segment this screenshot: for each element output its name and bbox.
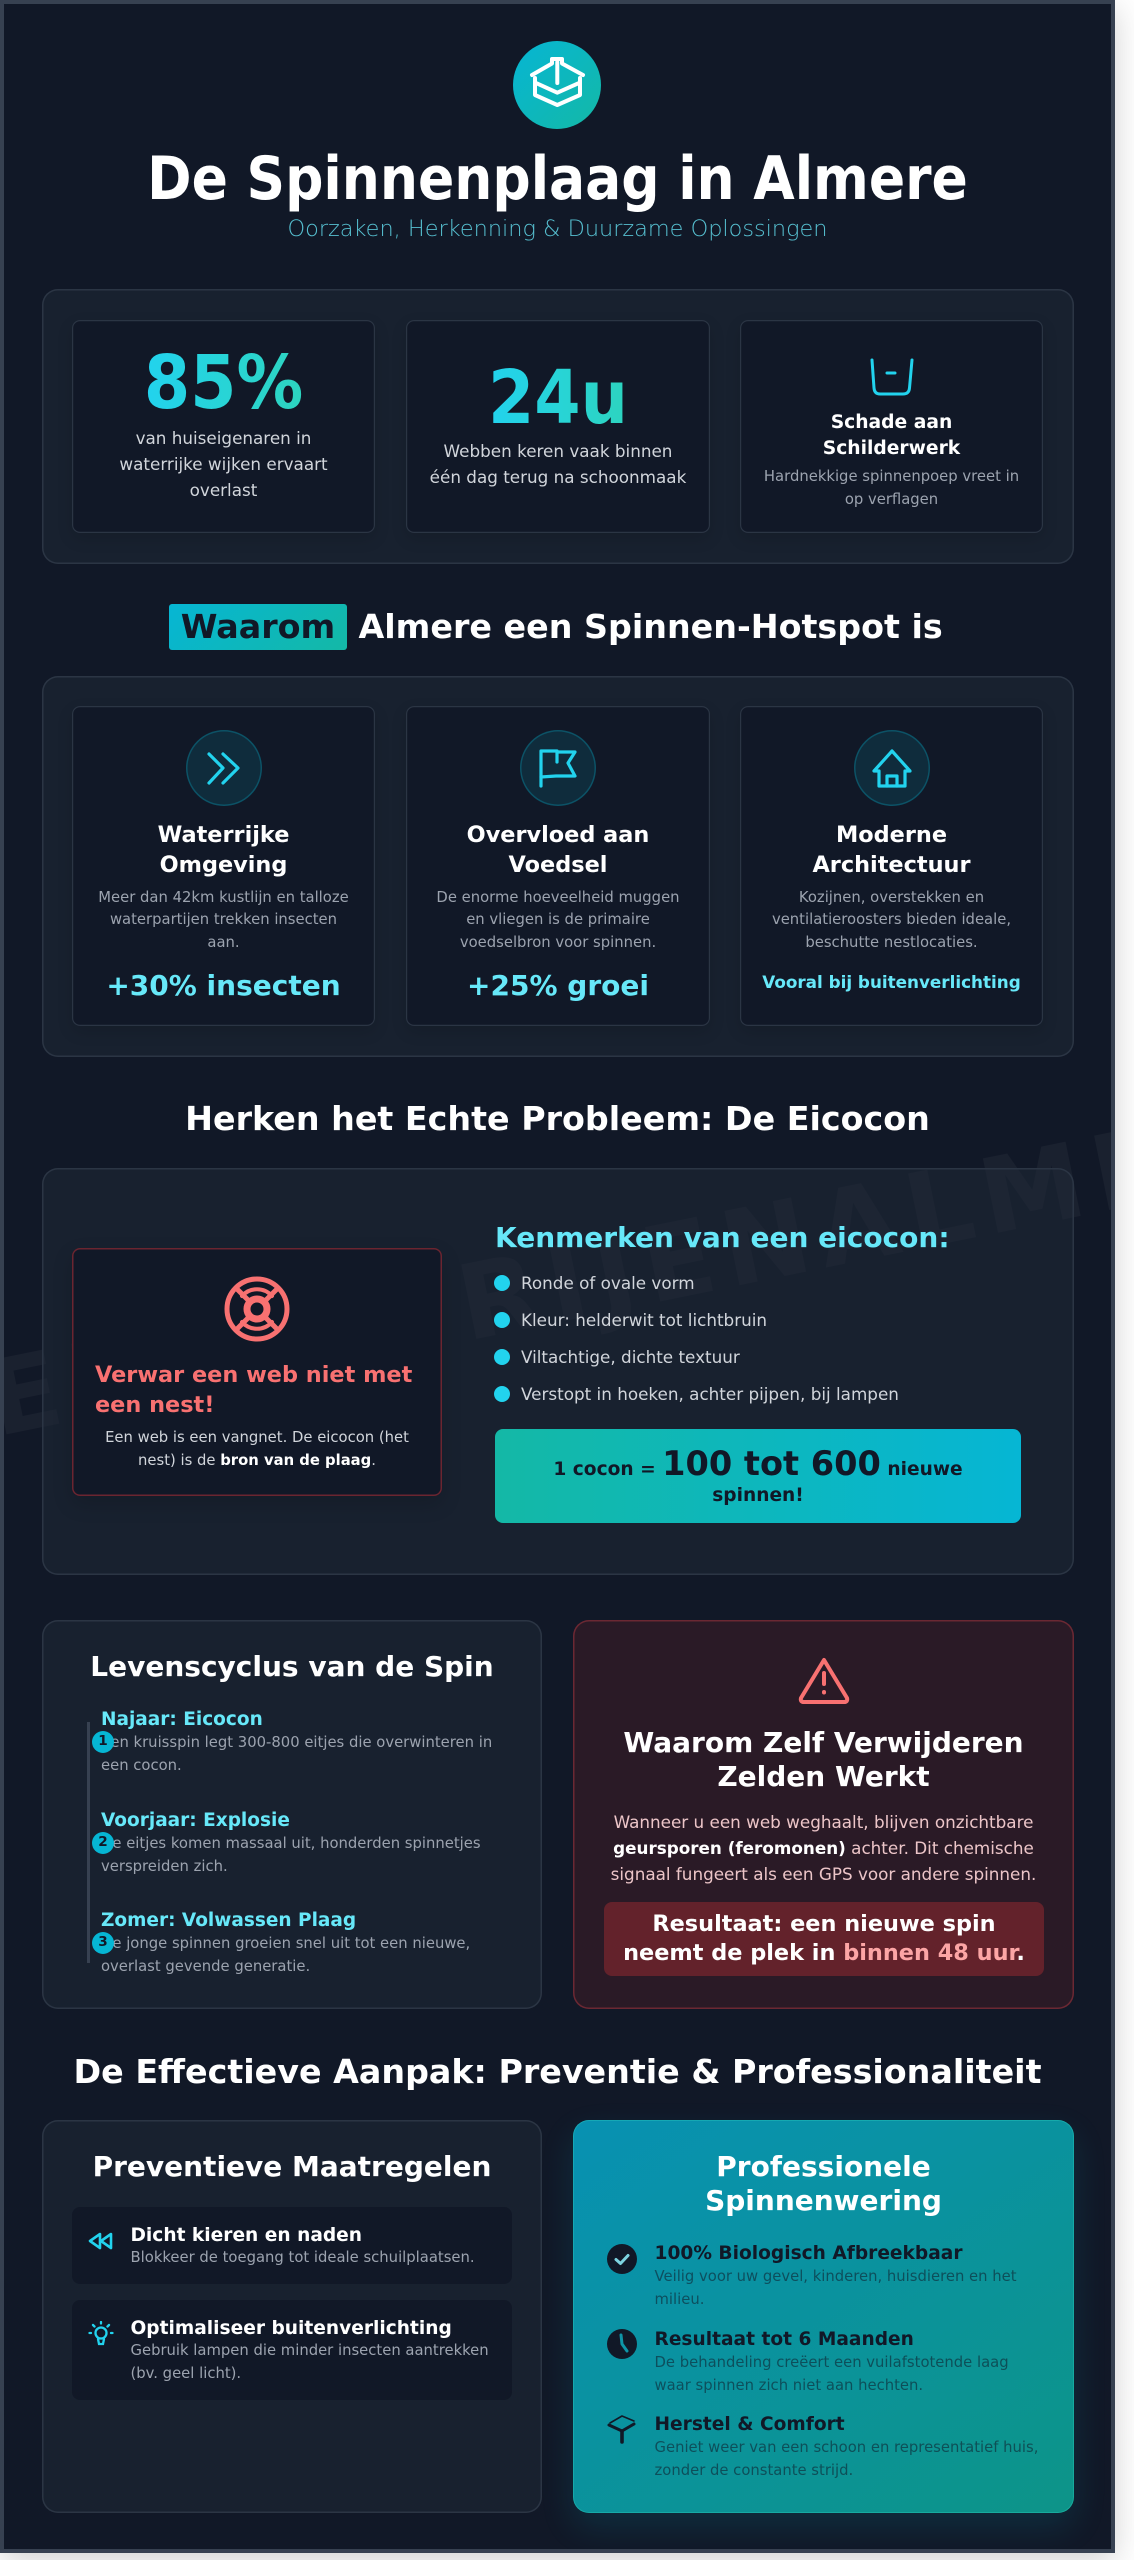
benefit: resultaat — [607, 2329, 1009, 2394]
callout: 100 tot 600: 1 cocon = 100 tot 600 nieuwe — [553, 1444, 963, 1483]
stat description: waterrijke wijken ervaart — [119, 454, 328, 474]
body text: signaal fungeert als een GPS voor andere spinnen. — [611, 1864, 1036, 1884]
card description: beschutte nestlocaties. — [805, 934, 978, 951]
body text — [611, 1812, 1036, 1884]
timeline step 3: overlast gevende generatie. — [101, 1958, 310, 1974]
card title: Waterrijke — [158, 822, 289, 848]
panel title — [623, 1726, 1024, 1793]
stat description: van huiseigenaren in — [136, 428, 311, 448]
icon: tool — [608, 2415, 636, 2444]
card stat: +30% insecten — [106, 969, 341, 1002]
features heading: Kenmerken van een eicocon: — [495, 1221, 950, 1254]
list item: Ronde of ovale vorm — [521, 1273, 695, 1293]
benefit: resultaat: waar spinnen zich niet aan hechten. — [654, 2376, 923, 2394]
heading: eicocon: Herken het Echte Probleem: De Eicocon — [185, 1099, 930, 1138]
step number — [92, 1731, 114, 1753]
benefit: resultaat: Resultaat tot 6 Maanden — [654, 2329, 914, 2350]
timeline step 2: Voorjaar: Explosie — [101, 1810, 290, 1831]
benefit: herstel — [608, 2414, 1038, 2478]
measure: verlichting — [72, 2300, 512, 2400]
card description: Kozijnen, overstekken en — [799, 889, 984, 906]
heading: aanpak: De Effectieve Aanpak: Preventie & Professionaliteit — [74, 2052, 1042, 2091]
step number: 1 — [98, 1733, 108, 1749]
panel title: Professionele — [716, 2150, 931, 2183]
measure: kieren: Dicht kieren en naden — [130, 2225, 362, 2246]
card description — [98, 889, 349, 951]
benefit: resultaat: De behandeling creëert een vuilafstotende laag — [654, 2354, 1009, 2371]
icon: house — [854, 730, 930, 806]
benefit: herstel: Herstel & Comfort — [654, 2414, 845, 2435]
timeline step 2: verspreiden zich. — [101, 1858, 228, 1874]
card description: aan. — [207, 934, 240, 951]
panel title: Zelden Werkt — [717, 1760, 930, 1793]
stat number: 24u — [488, 355, 628, 441]
benefit: herstel: zonder de constante strijd. — [654, 2462, 853, 2478]
card description — [436, 889, 680, 951]
panel title: Preventieve Maatregelen — [93, 2150, 491, 2183]
card description: op verflagen — [845, 490, 938, 508]
timeline step 2 — [92, 1810, 481, 1874]
timeline step 2: De eitjes komen massaal uit, honderden spinnetjes — [101, 1835, 481, 1852]
card title — [467, 822, 649, 878]
measure: verlichting: (bv. geel licht). — [130, 2364, 241, 2382]
timeline step 3: Zomer: Volwassen Plaag — [101, 1910, 356, 1931]
stat description: Webben keren vaak binnen — [444, 441, 672, 461]
benefit: herstel: Geniet weer van een schoon en representatief huis, — [654, 2439, 1038, 2456]
icon: lifebuoy — [224, 1276, 290, 1342]
callout: 100 tot 600: spinnen! — [712, 1485, 804, 1506]
card: overvloed aan voedsel — [406, 706, 710, 1026]
card description: Meer dan 42km kustlijn en talloze — [98, 889, 349, 906]
highlighted word: Waarom — [181, 607, 335, 646]
card description: De enorme hoeveelheid muggen — [436, 889, 680, 906]
step number — [92, 1832, 114, 1854]
warning text: Een web is een vangnet. De eicocon (het — [105, 1429, 409, 1446]
card description: ventilatieroosters bieden ideale, — [772, 911, 1011, 928]
icon: light bulb — [88, 2321, 114, 2346]
body text: geursporen (feromonen) achter. Dit chemische — [613, 1838, 1034, 1858]
feature list — [494, 1273, 899, 1404]
result box — [604, 1902, 1044, 1976]
card description: Hardnekkige spinnenpoep vreet in — [764, 468, 1019, 485]
stat card: 85% — [72, 320, 375, 533]
icon: rewind — [88, 2232, 112, 2250]
warning title: Verwar een web niet met — [95, 1362, 412, 1388]
stat number: 85% — [144, 340, 303, 426]
stat description — [430, 441, 686, 487]
result box: Resultaat: een nieuwe spin — [652, 1911, 996, 1937]
timeline step 1: een cocon. — [101, 1756, 182, 1774]
card title — [812, 822, 971, 878]
timeline step 3 — [92, 1910, 470, 1974]
card title — [823, 412, 960, 459]
panel title: Levenscyclus van de Spin — [90, 1650, 494, 1683]
body text: Wanneer u een web weghaalt, blijven onzichtbare — [614, 1812, 1033, 1832]
icon: warning triangle — [798, 1658, 850, 1704]
card: waterrijke omgeving — [72, 706, 375, 1026]
card description: voedselbron voor spinnen. — [460, 934, 656, 951]
card description: en vliegen is de primaire — [466, 911, 650, 928]
stat description: één dag terug na schoonmaak — [430, 467, 686, 487]
card title: Omgeving — [160, 852, 287, 878]
warning card — [72, 1248, 442, 1496]
card title: Moderne — [836, 822, 947, 848]
heading text: Almere een Spinnen-Hotspot is — [358, 607, 943, 646]
icon: flag — [520, 730, 596, 806]
benefit: biologisch — [607, 2243, 1017, 2308]
warning text — [105, 1429, 409, 1469]
step number: 2 — [98, 1834, 108, 1850]
warning title: een nest! — [95, 1392, 214, 1418]
step number — [92, 1932, 114, 1954]
result box: neemt de plek in binnen 48 uur. — [623, 1940, 1025, 1966]
icon: double chevron — [186, 730, 262, 806]
list item: Kleur: helderwit tot lichtbruin — [521, 1310, 767, 1330]
icon: cup — [870, 358, 914, 396]
icon: clock — [607, 2329, 637, 2359]
panel: reasons — [42, 676, 1074, 1057]
callout: 100 tot 600 — [495, 1429, 1021, 1523]
panel title: Waarom Zelf Verwijderen — [623, 1726, 1024, 1759]
warning text: nest) is de bron van de plaag. — [138, 1452, 376, 1469]
timeline line — [87, 1722, 90, 1963]
measure: kieren: Blokkeer de toegang tot ideale schuilplaatsen. — [130, 2249, 475, 2266]
card title — [158, 822, 289, 878]
panel title — [705, 2150, 942, 2217]
step number: 3 — [98, 1934, 108, 1950]
measure: verlichting: Optimaliseer buitenverlichting — [130, 2318, 452, 2339]
card stat: +25% groei — [467, 969, 649, 1002]
card: moderne architectuur — [740, 706, 1043, 1026]
card description — [764, 468, 1019, 508]
icon: check — [607, 2244, 637, 2274]
warning title — [95, 1362, 412, 1418]
timeline step 1: Najaar: Eicocon — [101, 1709, 263, 1730]
heading: waarom hotspot — [169, 604, 943, 650]
card title: Architectuur — [812, 852, 971, 878]
timeline step 1: Een kruisspin legt 300-800 eitjes die overwinteren in — [101, 1734, 492, 1751]
benefit: biologisch: milieu. — [654, 2290, 704, 2308]
panel title: Spinnenwering — [705, 2184, 942, 2217]
card title: Voedsel — [509, 852, 607, 878]
card stat: Vooral bij buitenverlichting — [762, 972, 1021, 992]
icon: header logo — [513, 41, 601, 129]
stat description — [119, 428, 328, 500]
panel: professionele spinnenwering — [573, 2120, 1074, 2513]
benefit: biologisch: Veilig voor uw gevel, kinderen, huisdieren en het — [654, 2268, 1017, 2285]
list item: Viltachtige, dichte textuur — [521, 1347, 740, 1367]
stat card: 24u — [406, 320, 710, 533]
measure: kieren — [72, 2207, 512, 2284]
benefit: biologisch: 100% Biologisch Afbreekbaar — [654, 2243, 962, 2264]
panel: key stats — [42, 289, 1074, 564]
timeline step 1 — [92, 1709, 492, 1774]
panel: eicocon — [42, 1168, 1074, 1575]
stat description: overlast — [190, 480, 257, 500]
panel: levenscyclus — [42, 1620, 542, 2009]
panel: preventieve maatregelen — [42, 2120, 542, 2513]
card title: Overvloed aan — [467, 822, 649, 848]
panel: waarom zelf verwijderen — [573, 1620, 1074, 2009]
list item: Verstopt in hoeken, achter pijpen, bij lampen — [521, 1384, 899, 1404]
card description — [772, 889, 1011, 951]
card title: Schade aan — [831, 412, 952, 433]
timeline step 3: De jonge spinnen groeien snel uit tot een nieuwe, — [101, 1935, 470, 1952]
card title: Schilderwerk — [823, 438, 960, 459]
card description: waterpartijen trekken insecten — [110, 911, 337, 928]
subtitle: Oorzaken, Herkenning & Duurzame Oplossingen — [288, 216, 827, 242]
stat card: schade aan schilderwerk — [740, 320, 1043, 533]
measure: verlichting: Gebruik lampen die minder insecten aantrekken — [130, 2342, 489, 2359]
title: De Spinnenplaag in Almere — [147, 145, 968, 214]
